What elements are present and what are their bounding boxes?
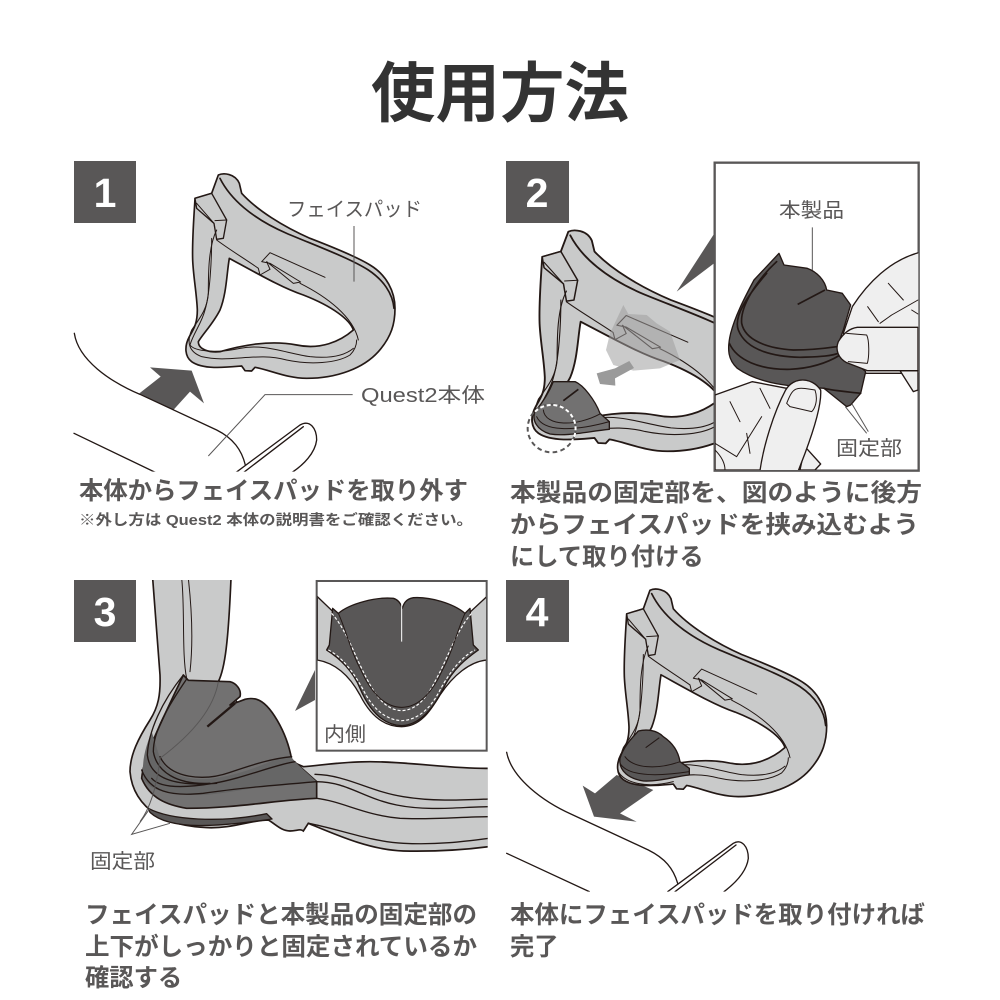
bottom dark strip — [148, 808, 272, 826]
hand left — [715, 382, 787, 470]
step number 4 — [506, 580, 569, 642]
ghost arrow — [597, 361, 634, 386]
leader lines — [812, 227, 868, 433]
panel: step 1 — [74, 161, 485, 529]
slit — [401, 604, 402, 642]
caption 4 — [510, 902, 925, 961]
pad clipped — [526, 230, 714, 454]
illustration: attaching product — [528, 163, 920, 471]
darker fold band — [143, 732, 317, 795]
step number 3: 3 — [94, 589, 116, 635]
illustration: fixing check closeup — [130, 578, 489, 851]
label: face pad: フェイスパッド — [287, 199, 422, 221]
inset pad shape — [317, 597, 487, 727]
label: product: 本製品 — [779, 199, 844, 222]
face pad — [618, 589, 827, 797]
step number 1: 1 — [94, 170, 116, 216]
panel: step 3 — [74, 578, 489, 992]
face pad — [186, 174, 395, 378]
headset body — [507, 752, 748, 892]
caption 2: からフェイスパッドを挟み込むよう — [510, 512, 919, 539]
caption 3 — [85, 902, 477, 992]
arrow up-right — [139, 367, 204, 410]
dashed circle — [528, 404, 576, 452]
caption 4: 本体にフェイスパッドを取り付ければ — [510, 902, 925, 929]
caption 3: 上下がしっかりと固定されているか — [85, 933, 477, 961]
label: Quest2: Quest2本体 — [361, 384, 485, 407]
caption 2: 本製品の固定部を、図のように後方 — [510, 480, 922, 507]
title: 使用方法 — [371, 57, 629, 130]
pointer wedge — [295, 670, 315, 711]
caption 3: 確認する — [85, 965, 182, 992]
label: inside: 内側 — [324, 723, 366, 746]
step number 1 — [74, 161, 136, 223]
note: ※外し方は Quest2 本体の説明書をご確認ください。 — [79, 511, 473, 529]
step number 2 — [506, 161, 569, 223]
dashed stitching — [328, 613, 475, 721]
product on pad — [620, 730, 689, 781]
step number 3 — [74, 580, 136, 642]
inset product — [327, 598, 478, 726]
product held — [729, 253, 866, 407]
leader lines — [132, 808, 170, 834]
product on pad — [534, 382, 609, 435]
slit — [207, 703, 235, 727]
ghost product — [606, 305, 680, 371]
pointer wedge — [677, 234, 714, 292]
label: fixing part: 固定部 — [836, 437, 902, 460]
pad closeup — [130, 578, 489, 851]
leader lines — [208, 226, 354, 456]
step number 2: 2 — [526, 170, 548, 216]
step number 4: 4 — [526, 589, 549, 635]
product translucent — [142, 675, 317, 808]
caption 3: フェイスパッドと本製品の固定部の — [85, 902, 477, 929]
contour lines — [142, 675, 317, 794]
panel: step 2 — [506, 161, 922, 571]
caption 1: 本体からフェイスパッドを取り外す — [79, 478, 468, 505]
arrow down-left — [583, 775, 653, 822]
illustration: face pad removal — [74, 174, 395, 473]
inset box — [715, 163, 920, 471]
hand right — [843, 252, 920, 373]
caption 4: 完了 — [510, 934, 559, 961]
inset box — [317, 581, 487, 751]
headset body — [74, 333, 317, 473]
panel: step 4 — [506, 580, 925, 961]
label: fixing part: 固定部 — [90, 850, 155, 873]
caption 2: にして取り付ける — [510, 544, 704, 571]
caption 2 — [510, 480, 922, 571]
illustration: reattach — [507, 589, 827, 892]
thumb right — [837, 327, 918, 371]
